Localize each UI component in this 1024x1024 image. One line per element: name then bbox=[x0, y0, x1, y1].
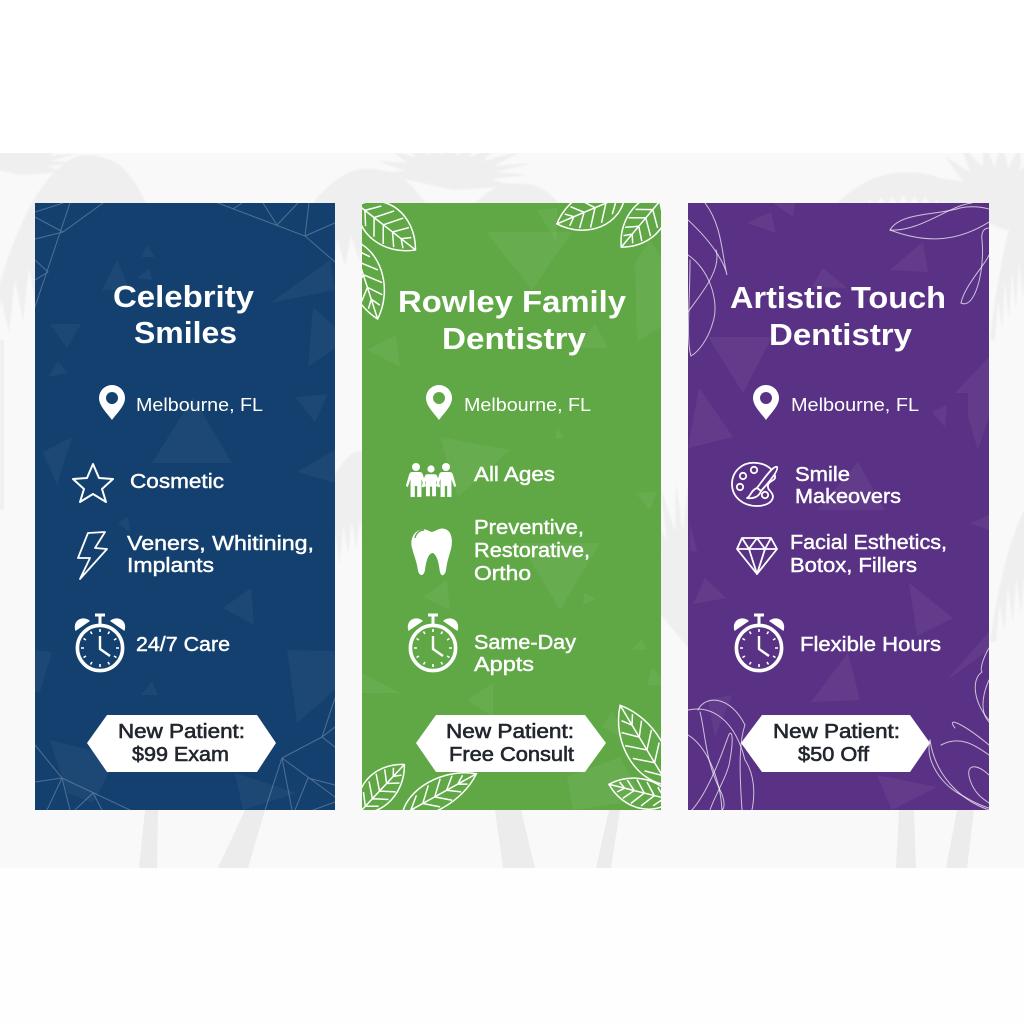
services text: Restorative, bbox=[474, 540, 590, 562]
offer badge: $99 Exam bbox=[132, 744, 229, 766]
heading: Rowley Family Dentistry bbox=[398, 284, 627, 356]
services text bbox=[474, 517, 590, 585]
heading: Celebrity Smiles: Celebrity bbox=[113, 279, 255, 314]
icon: star bbox=[73, 464, 113, 502]
services text bbox=[127, 533, 314, 577]
icon: location pin bbox=[753, 385, 779, 420]
specialty: Smile Makeovers bbox=[795, 464, 901, 508]
specialty: All Ages: All Ages bbox=[474, 464, 555, 486]
hours text bbox=[474, 632, 576, 676]
palm tree backdrop band bbox=[0, 136, 1024, 868]
panel: Rowley Family Dentistry bbox=[362, 203, 661, 810]
offer badge bbox=[741, 715, 930, 772]
icon: artist palette bbox=[732, 463, 777, 506]
services text: Ortho bbox=[474, 563, 531, 585]
icon: alarm clock bbox=[75, 615, 125, 671]
heading: Artistic Touch Dentistry bbox=[730, 280, 946, 352]
network line decoration: blue panel bbox=[35, 203, 335, 810]
offer badge: New Patient: bbox=[446, 721, 574, 743]
heading: Celebrity Smiles: Smiles bbox=[134, 315, 237, 350]
icon: diamond bbox=[737, 538, 777, 574]
location text: Melbourne, FL bbox=[464, 395, 591, 415]
heading: Artistic Touch Dentistry: Dentistry bbox=[769, 317, 913, 352]
panel: Artistic Touch Dentistry bbox=[688, 203, 989, 810]
hours text: Appts bbox=[474, 654, 534, 676]
bottom white band bbox=[0, 868, 1024, 1024]
hours text: Same-Day bbox=[474, 632, 576, 654]
location text: Melbourne, FL bbox=[791, 395, 919, 415]
heading: Celebrity Smiles bbox=[113, 279, 255, 350]
offer badge: Free Consult bbox=[449, 744, 574, 766]
services text: Preventive, bbox=[474, 517, 584, 539]
icon: tooth bbox=[411, 528, 452, 575]
top white band bbox=[0, 0, 1024, 153]
offer badge: $50 Off bbox=[798, 744, 869, 766]
line-art leaves: purple panel bbox=[688, 203, 989, 810]
icon: family bbox=[406, 463, 456, 497]
icon: alarm clock bbox=[734, 615, 784, 671]
icon: alarm clock bbox=[408, 615, 458, 671]
heading: Rowley Family Dentistry: Rowley Family bbox=[398, 284, 627, 319]
heading: Artistic Touch Dentistry: Artistic Touch bbox=[730, 280, 946, 315]
icon: location pin bbox=[426, 385, 452, 420]
offer badge: New Patient: bbox=[118, 721, 245, 743]
hours text: Flexible Hours bbox=[800, 634, 941, 656]
specialty: Cosmetic: Cosmetic bbox=[130, 471, 224, 493]
icon: location pin bbox=[99, 385, 125, 420]
offer badge bbox=[87, 715, 276, 772]
location text: Melbourne, FL bbox=[136, 395, 263, 415]
leaf decoration: green panel bbox=[337, 179, 682, 827]
services text: Veners, Whitining, bbox=[127, 533, 314, 555]
icon: lightning bolt bbox=[78, 532, 107, 579]
services text: Facial Esthetics, bbox=[790, 532, 947, 554]
specialty: Smile Makeovers: Makeovers bbox=[795, 486, 901, 508]
services text: Implants bbox=[127, 555, 214, 577]
offer badge bbox=[416, 715, 606, 772]
services text: Botox, Fillers bbox=[790, 555, 917, 577]
offer badge: New Patient: bbox=[773, 721, 900, 743]
background triangles: green panel bbox=[362, 208, 661, 810]
services text bbox=[790, 532, 947, 577]
hours text: 24/7 Care bbox=[136, 634, 230, 656]
panel: Celebrity Smiles bbox=[35, 203, 335, 810]
background triangles: purple panel bbox=[688, 203, 989, 810]
specialty: Smile Makeovers: Smile bbox=[795, 464, 850, 486]
heading: Rowley Family Dentistry: Dentistry bbox=[442, 321, 587, 356]
background triangles: blue panel bbox=[35, 245, 335, 810]
